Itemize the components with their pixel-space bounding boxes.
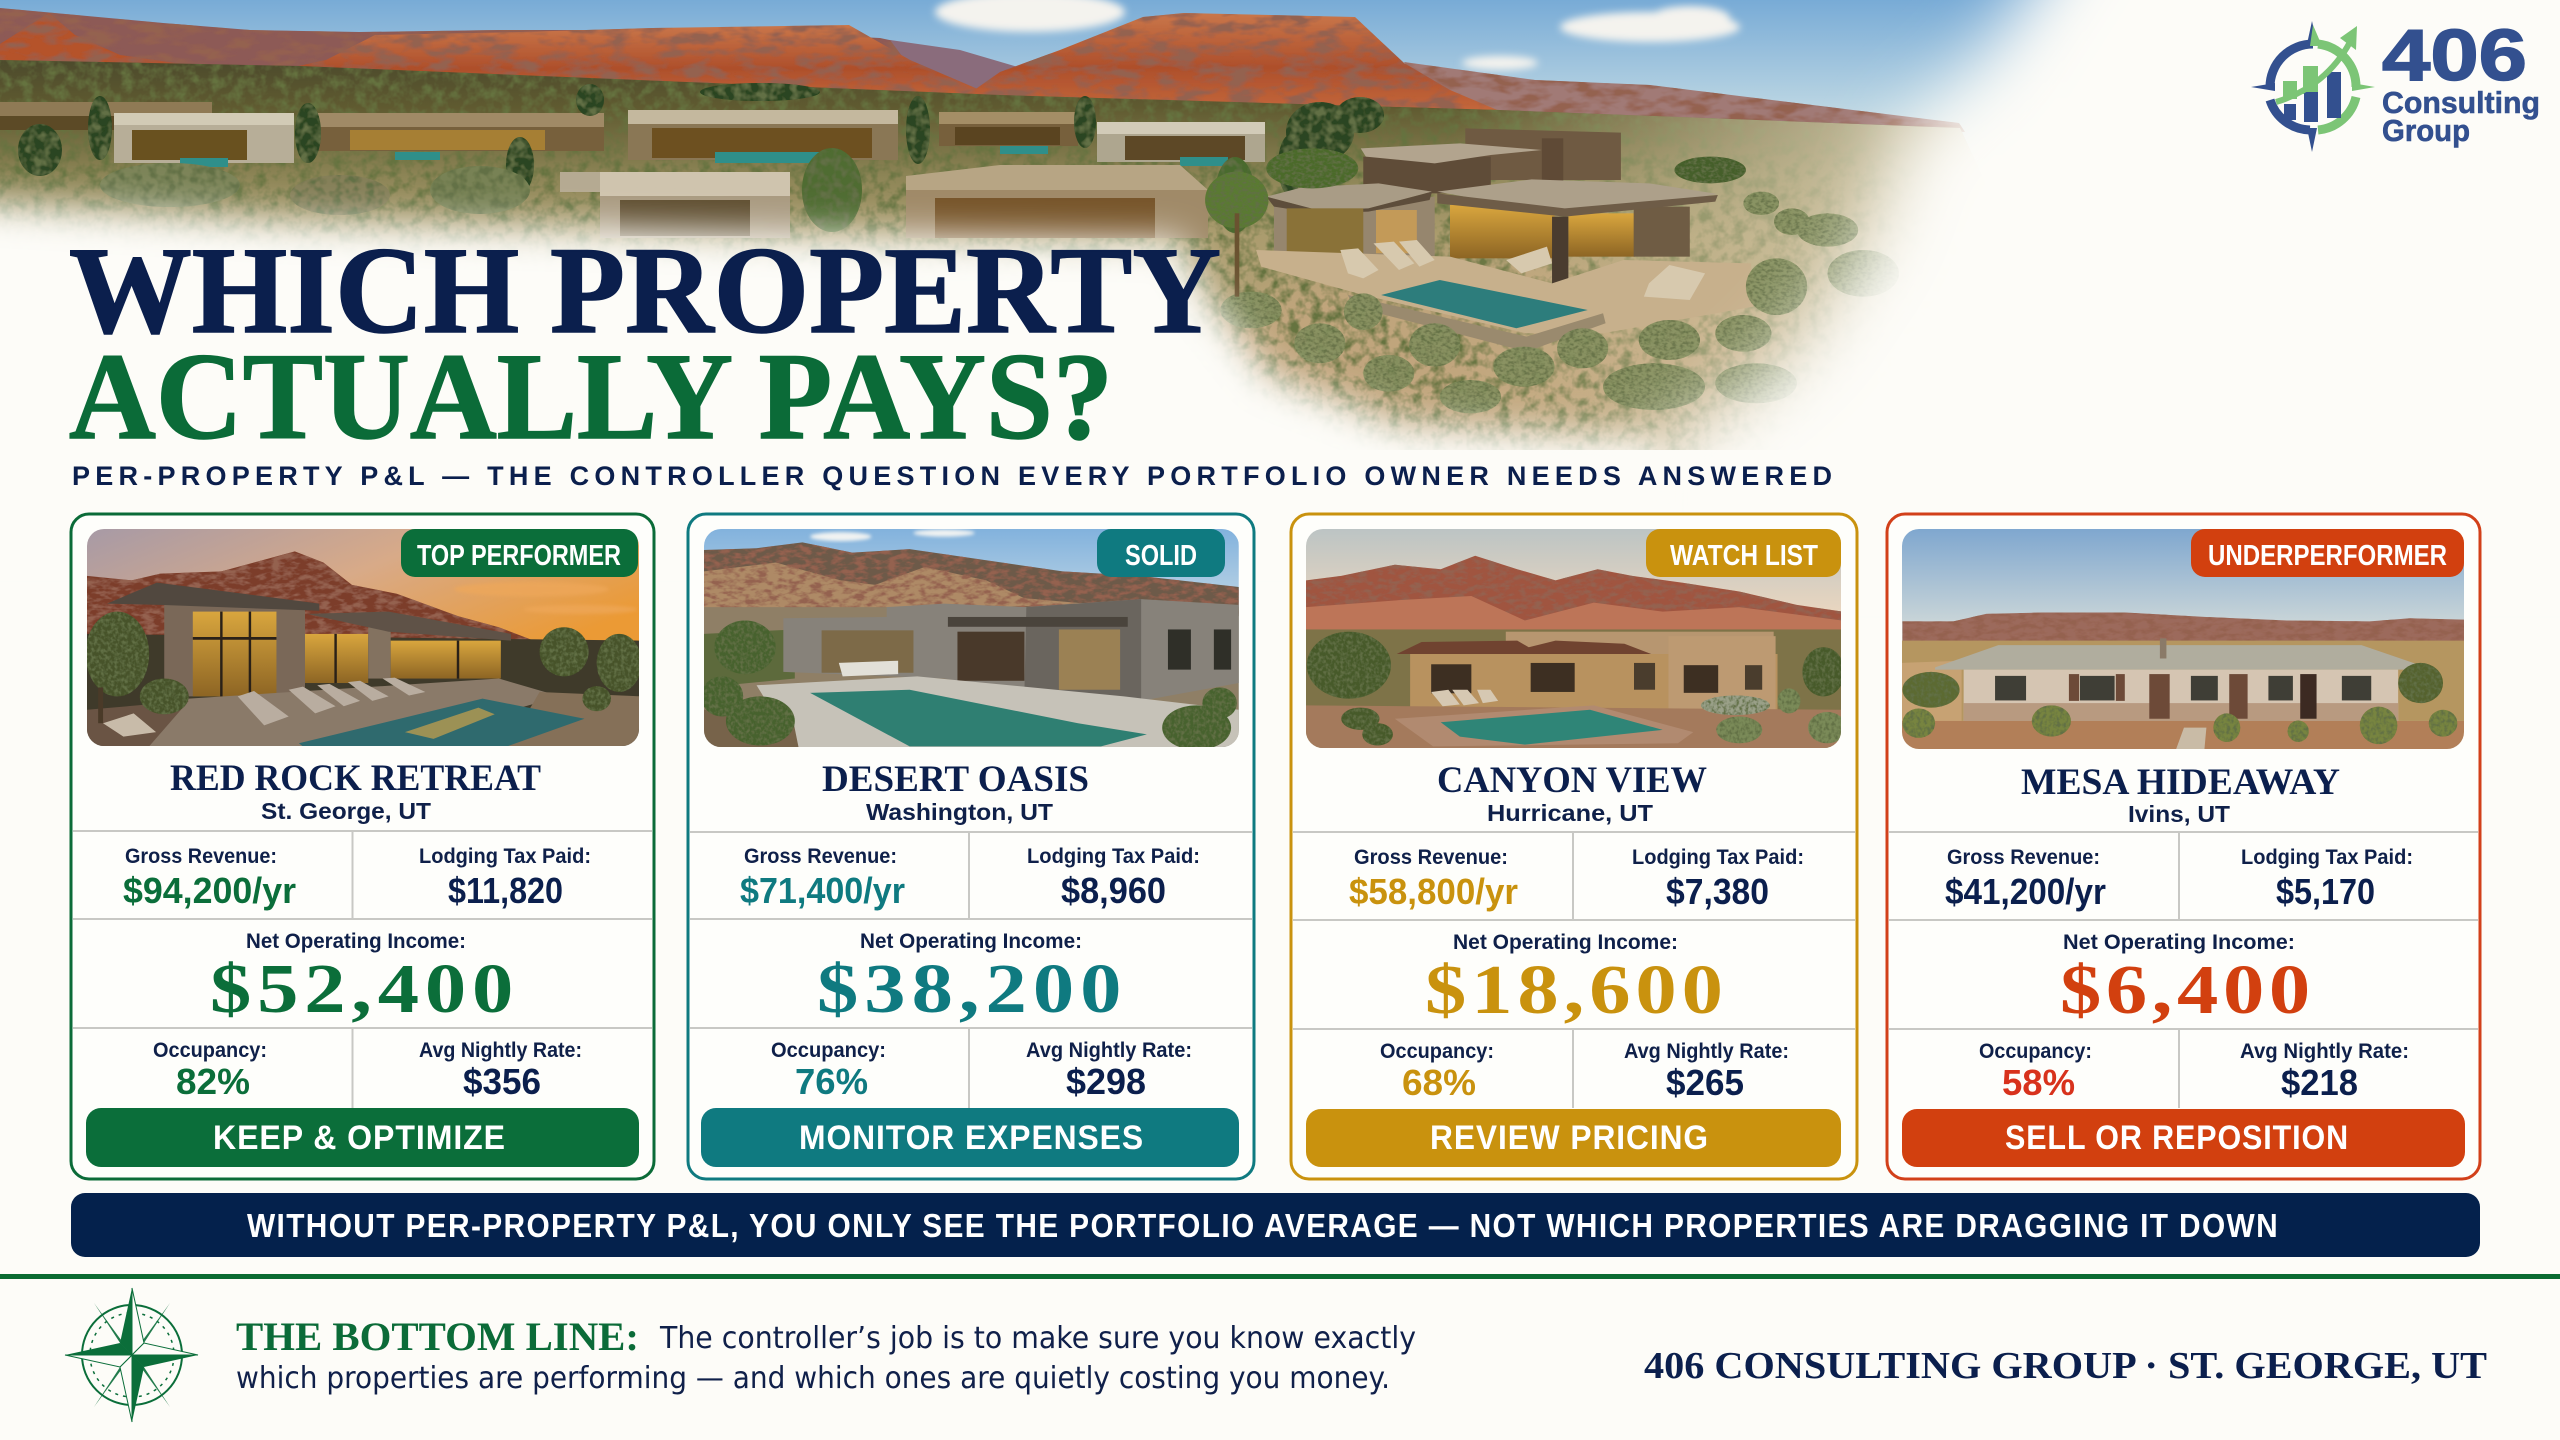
panel: Canyon View [1291, 514, 1857, 1179]
title [69, 222, 1221, 465]
button: action [701, 1108, 1239, 1167]
metric: lodging tax [419, 845, 591, 911]
metric: net operating income: Net Operating Income: [246, 930, 466, 953]
panel: Red Rock Retreat [71, 514, 654, 1179]
badge: underperformer [2191, 529, 2464, 577]
text: 406: 406 [2382, 16, 2527, 96]
badge: top performer: TOP PERFORMER [417, 540, 621, 572]
heading: name: RED ROCK RETREAT [170, 758, 541, 799]
heading: name: DESERT OASIS [822, 759, 1089, 800]
banner: portfolio average warning: WITHOUT PER-PROPERTY P&L, YOU ONLY SEE THE PORTFOLIO AVERAGE — NOT WHICH PROPERTIES ARE DRAGGING IT DOWN [247, 1207, 2279, 1244]
metric: occupancy: Occupancy: [771, 1039, 886, 1062]
metric: net operating income: $18,600 [1425, 951, 1723, 1029]
metric: nightly rate [1026, 1039, 1192, 1102]
heading: name: MESA HIDEAWAY [2021, 762, 2340, 803]
hero: desert resort landscape [0, 0, 2085, 450]
title: WHICH PROPERTY [69, 222, 1221, 359]
photo: Desert Oasis [701, 529, 1239, 750]
metric: lodging tax [1027, 845, 1200, 911]
text: bottom line: which properties are performing — and which ones are quietly costing you money. [236, 1361, 1390, 1396]
button: action: SELL OR REPOSITION [2005, 1119, 2349, 1157]
button: action: MONITOR EXPENSES [799, 1119, 1144, 1157]
metric: gross revenue: $94,200/yr [123, 870, 296, 911]
metric: gross revenue: $71,400/yr [740, 870, 905, 911]
text: Consulting: Consulting [2382, 85, 2540, 120]
metric: gross revenue: Gross Revenue: [1947, 846, 2100, 869]
metric: occupancy: Occupancy: [153, 1039, 267, 1062]
metric: nightly rate: $356 [463, 1061, 541, 1102]
metric: net operating income: $52,400 [210, 950, 513, 1028]
metric: gross revenue: $58,800/yr [1349, 871, 1518, 912]
text: bottom line: THE BOTTOM LINE: [236, 1314, 639, 1359]
metric: net operating income: $38,200 [817, 950, 1121, 1028]
metric: nightly rate: Avg Nightly Rate: [1624, 1040, 1789, 1063]
metric: gross revenue: Gross Revenue: [1354, 846, 1508, 869]
text: location: Hurricane, UT [1487, 800, 1653, 826]
metric: occupancy: 76% [795, 1061, 868, 1102]
metric: occupancy: 58% [2002, 1062, 2075, 1103]
metric: nightly rate [2240, 1040, 2409, 1103]
metric: lodging tax: Lodging Tax Paid: [419, 845, 591, 868]
button: action [86, 1108, 639, 1167]
metric: occupancy: Occupancy: [1380, 1040, 1494, 1063]
metric: occupancy: 82% [176, 1061, 250, 1102]
photo: Red Rock Retreat [85, 529, 642, 748]
metric: occupancy [1979, 1040, 2092, 1103]
text: location: St. George, UT [261, 798, 431, 824]
metric: nightly rate: $218 [2281, 1062, 2358, 1103]
hero: cream fade mask left and bottom [0, 200, 1750, 600]
metric: nightly rate: Avg Nightly Rate: [419, 1039, 582, 1062]
metric: gross revenue: $41,200/yr [1945, 871, 2106, 912]
metric: nightly rate: Avg Nightly Rate: [2240, 1040, 2409, 1063]
metric: occupancy [153, 1039, 267, 1102]
heading: name: CANYON VIEW [1437, 760, 1707, 801]
button: action [1306, 1109, 1841, 1167]
metric: nightly rate [419, 1039, 582, 1102]
hero: cream fade mask right [1650, 0, 2560, 650]
badge: top performer [401, 529, 638, 577]
text: location: Ivins, UT [2128, 801, 2230, 827]
metric: net operating income: Net Operating Income: [1453, 931, 1678, 954]
badge: solid [1097, 529, 1225, 577]
metric: lodging tax: $11,820 [448, 870, 563, 911]
metric: lodging tax: $8,960 [1061, 870, 1166, 911]
text: Group: Group [2382, 113, 2470, 148]
metric: gross revenue: Gross Revenue: [744, 845, 897, 868]
metric: occupancy: Occupancy: [1979, 1040, 2092, 1063]
text: bottom line: The controller’s job is to make sure you know exactly [659, 1321, 1416, 1356]
metric: gross revenue [123, 845, 296, 911]
metric: nightly rate: Avg Nightly Rate: [1026, 1039, 1192, 1062]
metric: net operating income: $6,400 [2060, 951, 2310, 1029]
metric: nightly rate [1624, 1040, 1789, 1103]
metric: lodging tax [2241, 846, 2413, 912]
metric: occupancy [771, 1039, 886, 1102]
title: ACTUALLY PAYS? [69, 328, 1113, 465]
badge: solid: SOLID [1125, 540, 1197, 572]
metric: lodging tax: Lodging Tax Paid: [1632, 846, 1804, 869]
hero: back row villas [0, 83, 1384, 195]
icon: compass with growth chart [2251, 21, 2375, 152]
metric: gross revenue [740, 845, 905, 911]
panel: Mesa Hideaway [1887, 514, 2480, 1179]
badge: underperformer: UNDERPERFORMER [2208, 540, 2447, 572]
photo: Canyon View [1303, 529, 1846, 750]
metric: gross revenue [1945, 846, 2106, 912]
button: action [1902, 1109, 2465, 1167]
text: location: Washington, UT [866, 799, 1053, 825]
logo: 406 Consulting Group [2251, 16, 2540, 152]
text: company footer: 406 CONSULTING GROUP · ST. GEORGE, UT [1644, 1345, 2487, 1387]
metric: lodging tax: $5,170 [2276, 871, 2375, 912]
button: action: KEEP & OPTIMIZE [213, 1119, 506, 1157]
photo: Mesa Hideaway [1900, 529, 2468, 752]
metric: nightly rate: $298 [1066, 1061, 1146, 1102]
hero: main luxury villa [1205, 128, 1899, 413]
metric: net operating income: Net Operating Income: [860, 930, 1082, 953]
badge: watch list [1646, 529, 1841, 577]
metric: gross revenue [1349, 846, 1518, 912]
metric: lodging tax: Lodging Tax Paid: [1027, 845, 1200, 868]
badge: watch list: WATCH LIST [1670, 540, 1818, 572]
subtitle: PER-PROPERTY P&L — THE CONTROLLER QUESTION EVERY PORTFOLIO OWNER NEEDS ANSWERED [72, 461, 1832, 491]
metric: occupancy: 68% [1402, 1062, 1476, 1103]
button: action: REVIEW PRICING [1430, 1119, 1709, 1157]
text: bottom line [236, 1314, 1416, 1396]
metric: lodging tax [1632, 846, 1804, 912]
banner: portfolio average warning [71, 1193, 2480, 1257]
icon: compass rose [65, 1288, 198, 1422]
panel: Desert Oasis [688, 514, 1254, 1179]
hero: front row villas [100, 148, 1255, 238]
metric: gross revenue: Gross Revenue: [125, 845, 277, 868]
metric: net operating income: Net Operating Income: [2063, 931, 2295, 954]
metric: nightly rate: $265 [1666, 1062, 1744, 1103]
metric: lodging tax: $7,380 [1666, 871, 1769, 912]
metric: lodging tax: Lodging Tax Paid: [2241, 846, 2413, 869]
metric: occupancy [1380, 1040, 1494, 1103]
